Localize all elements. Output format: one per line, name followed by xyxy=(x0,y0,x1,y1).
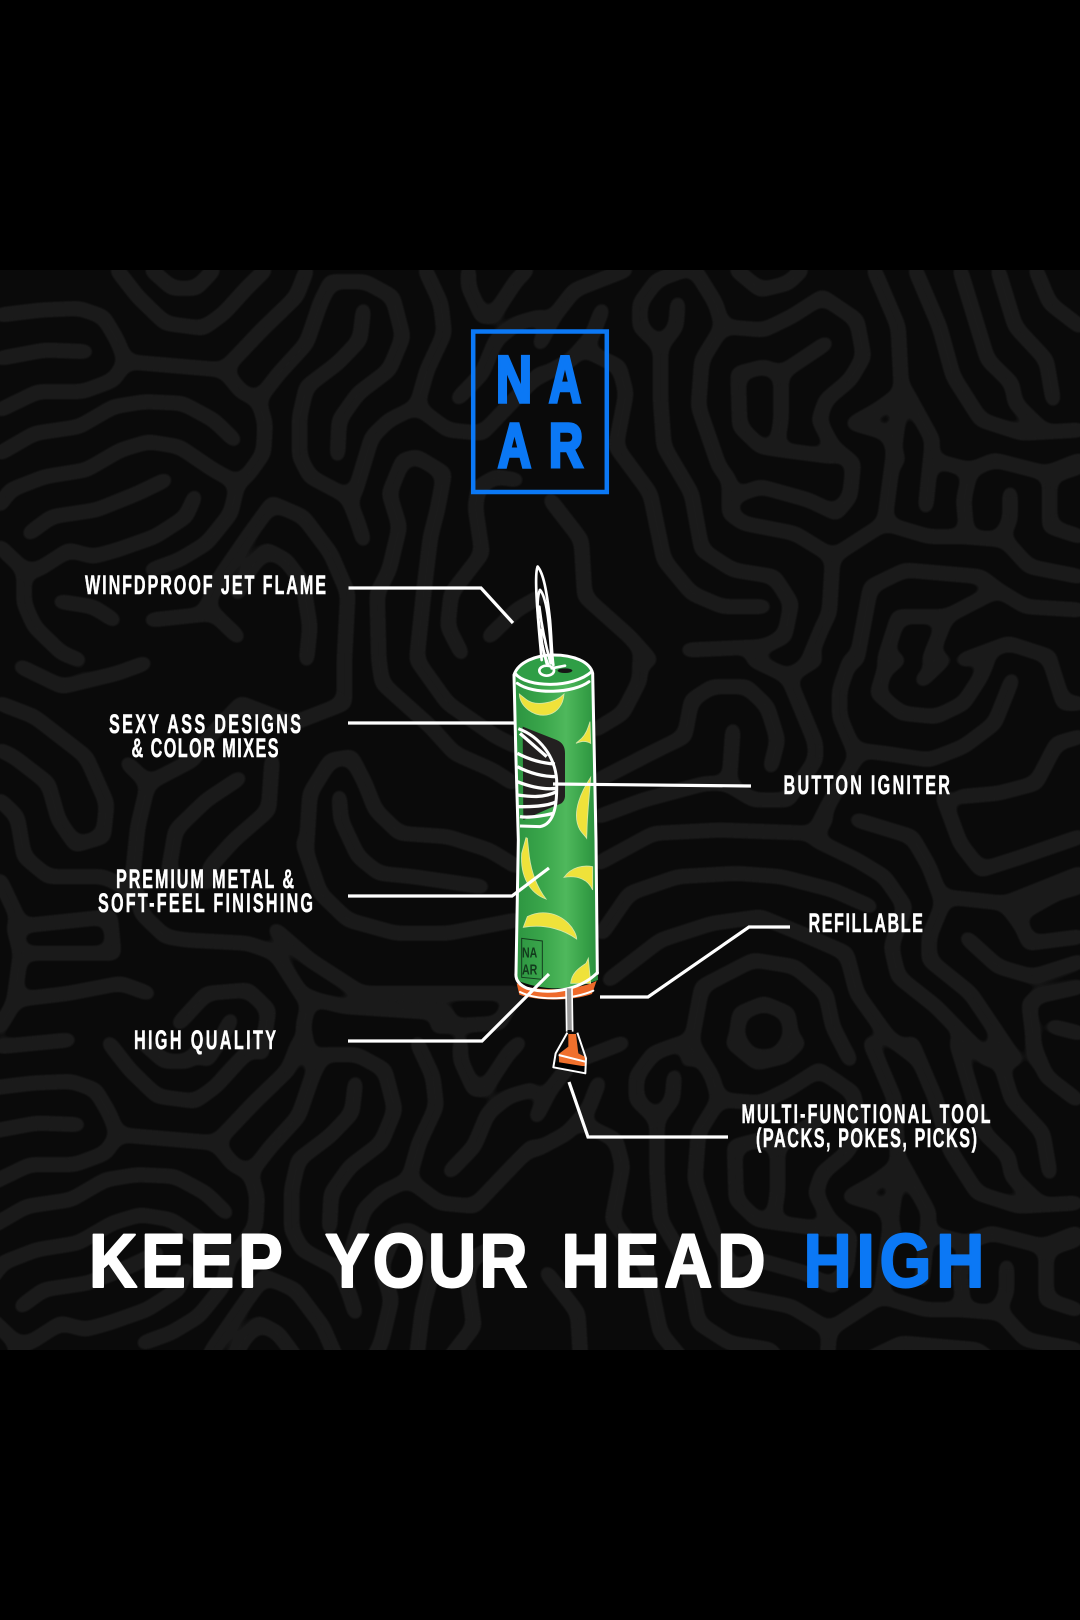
igniter button xyxy=(517,727,565,827)
label: windproof jet flame: WINFDPROOF JET FLAME xyxy=(85,570,326,600)
label: multi-functional tool: MULTI-FUNCTIONAL TOOL xyxy=(742,1099,990,1129)
small logo on body xyxy=(522,938,542,979)
headline: HIGH xyxy=(804,1219,989,1304)
label: multi-functional tool: (PACKS, POKES, PICKS) xyxy=(756,1123,977,1153)
small logo on body: AR xyxy=(522,963,538,979)
logo: NAAR box: A xyxy=(498,412,531,481)
headline: YOUR xyxy=(325,1219,531,1304)
leader line: refillable xyxy=(600,927,790,997)
label: multi-functional tool xyxy=(742,1099,990,1153)
label: premium metal: SOFT-FEEL FINISHING xyxy=(98,888,313,918)
background maze pattern xyxy=(0,270,1080,1433)
leader line: flame xyxy=(348,588,513,623)
flame xyxy=(536,567,553,665)
leader line: finishing xyxy=(348,868,549,896)
bananas xyxy=(519,694,593,983)
label: sexy ass designs: & COLOR MIXES xyxy=(132,733,279,763)
small logo on body: NA xyxy=(522,946,538,962)
lighter white outline xyxy=(514,655,597,998)
headline: HEAD xyxy=(562,1219,770,1304)
logo: NAAR box: N xyxy=(496,342,532,416)
headline: KEEP xyxy=(89,1219,287,1304)
logo: NAAR box: R xyxy=(549,412,583,481)
label: button igniter: BUTTON IGNITER xyxy=(784,770,950,800)
label: high quality: HIGH QUALITY xyxy=(134,1025,276,1055)
leader line: designs xyxy=(348,721,515,725)
leader line: multi-tool xyxy=(569,1082,728,1137)
label: sexy ass designs xyxy=(109,709,301,763)
illustration: lighter xyxy=(514,567,598,1073)
leader line: button igniter xyxy=(553,784,751,786)
label: premium metal xyxy=(98,864,313,918)
orange base xyxy=(517,981,597,1000)
label: refillable: REFILLABLE xyxy=(808,908,923,938)
leader line: high quality xyxy=(348,974,549,1041)
headline xyxy=(89,1219,989,1304)
dark panel background xyxy=(0,270,1080,1350)
logo: NAAR box xyxy=(473,332,607,492)
logo: NAAR box: A xyxy=(549,342,581,416)
lighter body xyxy=(514,657,598,988)
multi-tool xyxy=(553,988,586,1073)
nozzle xyxy=(539,666,572,676)
lighter top cap xyxy=(515,657,592,685)
label: premium metal: PREMIUM METAL & xyxy=(116,864,294,894)
label: sexy ass designs: SEXY ASS DESIGNS xyxy=(109,709,301,739)
